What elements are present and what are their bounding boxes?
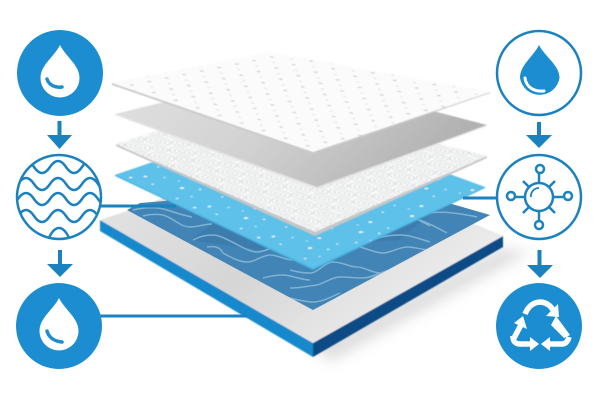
layer: top perforated sheet — [112, 52, 490, 154]
layer: grey sheet — [115, 70, 487, 189]
arrow: left one — [47, 121, 72, 149]
icon: outlined circle with blue drop — [497, 31, 581, 115]
icon: filled water drop, bottom left — [16, 283, 102, 369]
base shadow — [313, 248, 530, 362]
icon: recycling symbol — [496, 283, 582, 369]
layer: water wave sheet — [127, 200, 490, 310]
icon: filled water drop, top left — [17, 30, 103, 116]
arrow: left two — [47, 250, 73, 277]
layer: blue speckled sheet — [115, 120, 485, 270]
icon: microbe circle — [497, 155, 581, 239]
layer: patterned sheet — [116, 90, 487, 236]
layer: base slab — [100, 150, 503, 357]
arrow: right two — [527, 250, 553, 278]
icon: wave circle — [16, 154, 102, 240]
connector lines — [100, 198, 497, 316]
arrow: right one — [526, 122, 552, 148]
